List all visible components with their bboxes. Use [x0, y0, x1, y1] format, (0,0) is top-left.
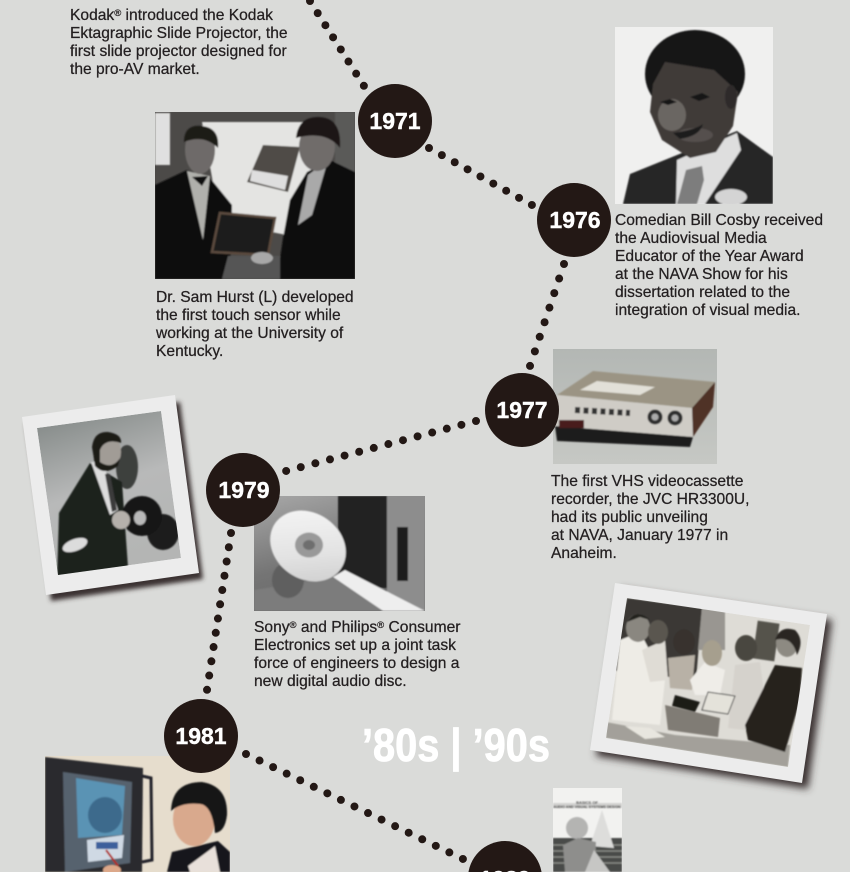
year node: cut off at page bottom: [468, 841, 542, 872]
caption: Sony and Philips: Consumer: [384, 619, 460, 636]
caption: Bill Cosby award: dissertation related to the: [615, 284, 790, 301]
decade heading: ’80s | ’90s: [362, 719, 550, 771]
caption: Kodak slide projector: introduced the Kodak: [121, 7, 273, 24]
caption: Sony and Philips: and Philips: [297, 619, 377, 636]
caption: Kodak slide projector: Ektagraphic Slide Projector, the: [70, 25, 288, 42]
caption: Bill Cosby award: Comedian Bill Cosby received: [615, 212, 823, 229]
caption: Sony and Philips: Electronics set up a joint task: [254, 637, 456, 654]
caption: Bill Cosby award: integration of visual media.: [615, 302, 800, 319]
year node: 1971: [358, 84, 432, 158]
caption: Kodak slide projector: the pro-AV market.: [70, 61, 200, 78]
year node: 1979: [206, 453, 280, 527]
caption: VHS recorder: The first VHS videocassette: [551, 473, 743, 490]
polaroid: group presentation: [590, 583, 832, 789]
caption: VHS recorder: Anaheim.: [551, 545, 617, 562]
photo: book cover: [553, 788, 622, 872]
year node: 1979: 1979: [218, 477, 270, 503]
caption: VHS recorder: at NAVA, January 1977 in: [551, 527, 728, 544]
caption: Sony and Philips: force of engineers to design a: [254, 655, 460, 672]
caption: Dr. Sam Hurst: the first touch sensor while: [156, 307, 341, 324]
caption: Sony and Philips: new digital audio disc.: [254, 673, 407, 690]
photo: JVC HR3300U VHS recorder: [553, 349, 717, 464]
caption: Dr. Sam Hurst: Kentucky.: [156, 343, 223, 360]
caption: Bill Cosby award: the Audiovisual Media: [615, 230, 767, 247]
caption: VHS recorder: had its public unveiling: [551, 509, 708, 526]
caption: Bill Cosby award: Educator of the Year Award: [615, 248, 804, 265]
caption: Kodak slide projector: ®: [114, 8, 121, 19]
year node: 1977: [485, 373, 559, 447]
year node: 1981: [164, 699, 238, 773]
caption: Kodak slide projector: Kodak: [70, 7, 273, 24]
year node: 1971: 1971: [369, 108, 421, 134]
caption: Kodak slide projector: first slide projector designed for: [70, 43, 287, 60]
caption: Sony and Philips: ®: [290, 620, 297, 631]
caption: Dr. Sam Hurst: working at the University of: [155, 325, 344, 342]
photo: Dr. Sam Hurst with touch sensor: [155, 112, 355, 279]
caption: Sony and Philips: Sony: [254, 619, 460, 636]
photo: book cover: BASICS OF: [576, 800, 598, 805]
caption: Bill Cosby award: at the NAVA Show for his: [615, 266, 788, 283]
photo: compact disc and player: [254, 496, 425, 611]
year node: 1977: 1977: [496, 397, 548, 423]
caption: Sony and Philips: ®: [377, 620, 384, 631]
photo: book cover: AUDIO AND VISUAL SYSTEMS DESIGN: [553, 805, 621, 809]
dotted timeline path: [207, 1, 564, 859]
year node: 1976: 1976: [549, 207, 601, 233]
photo: Bill Cosby portrait: [615, 27, 773, 205]
year node: 1981: 1981: [175, 723, 227, 749]
caption: Dr. Sam Hurst: Dr. Sam Hurst (L) developed: [156, 289, 354, 306]
year node: 1976: [537, 183, 611, 257]
polaroid: man with disc: [22, 395, 203, 601]
photo: computer graphics monitor: [45, 756, 230, 872]
caption: VHS recorder: recorder, the JVC HR3300U,: [551, 491, 749, 508]
